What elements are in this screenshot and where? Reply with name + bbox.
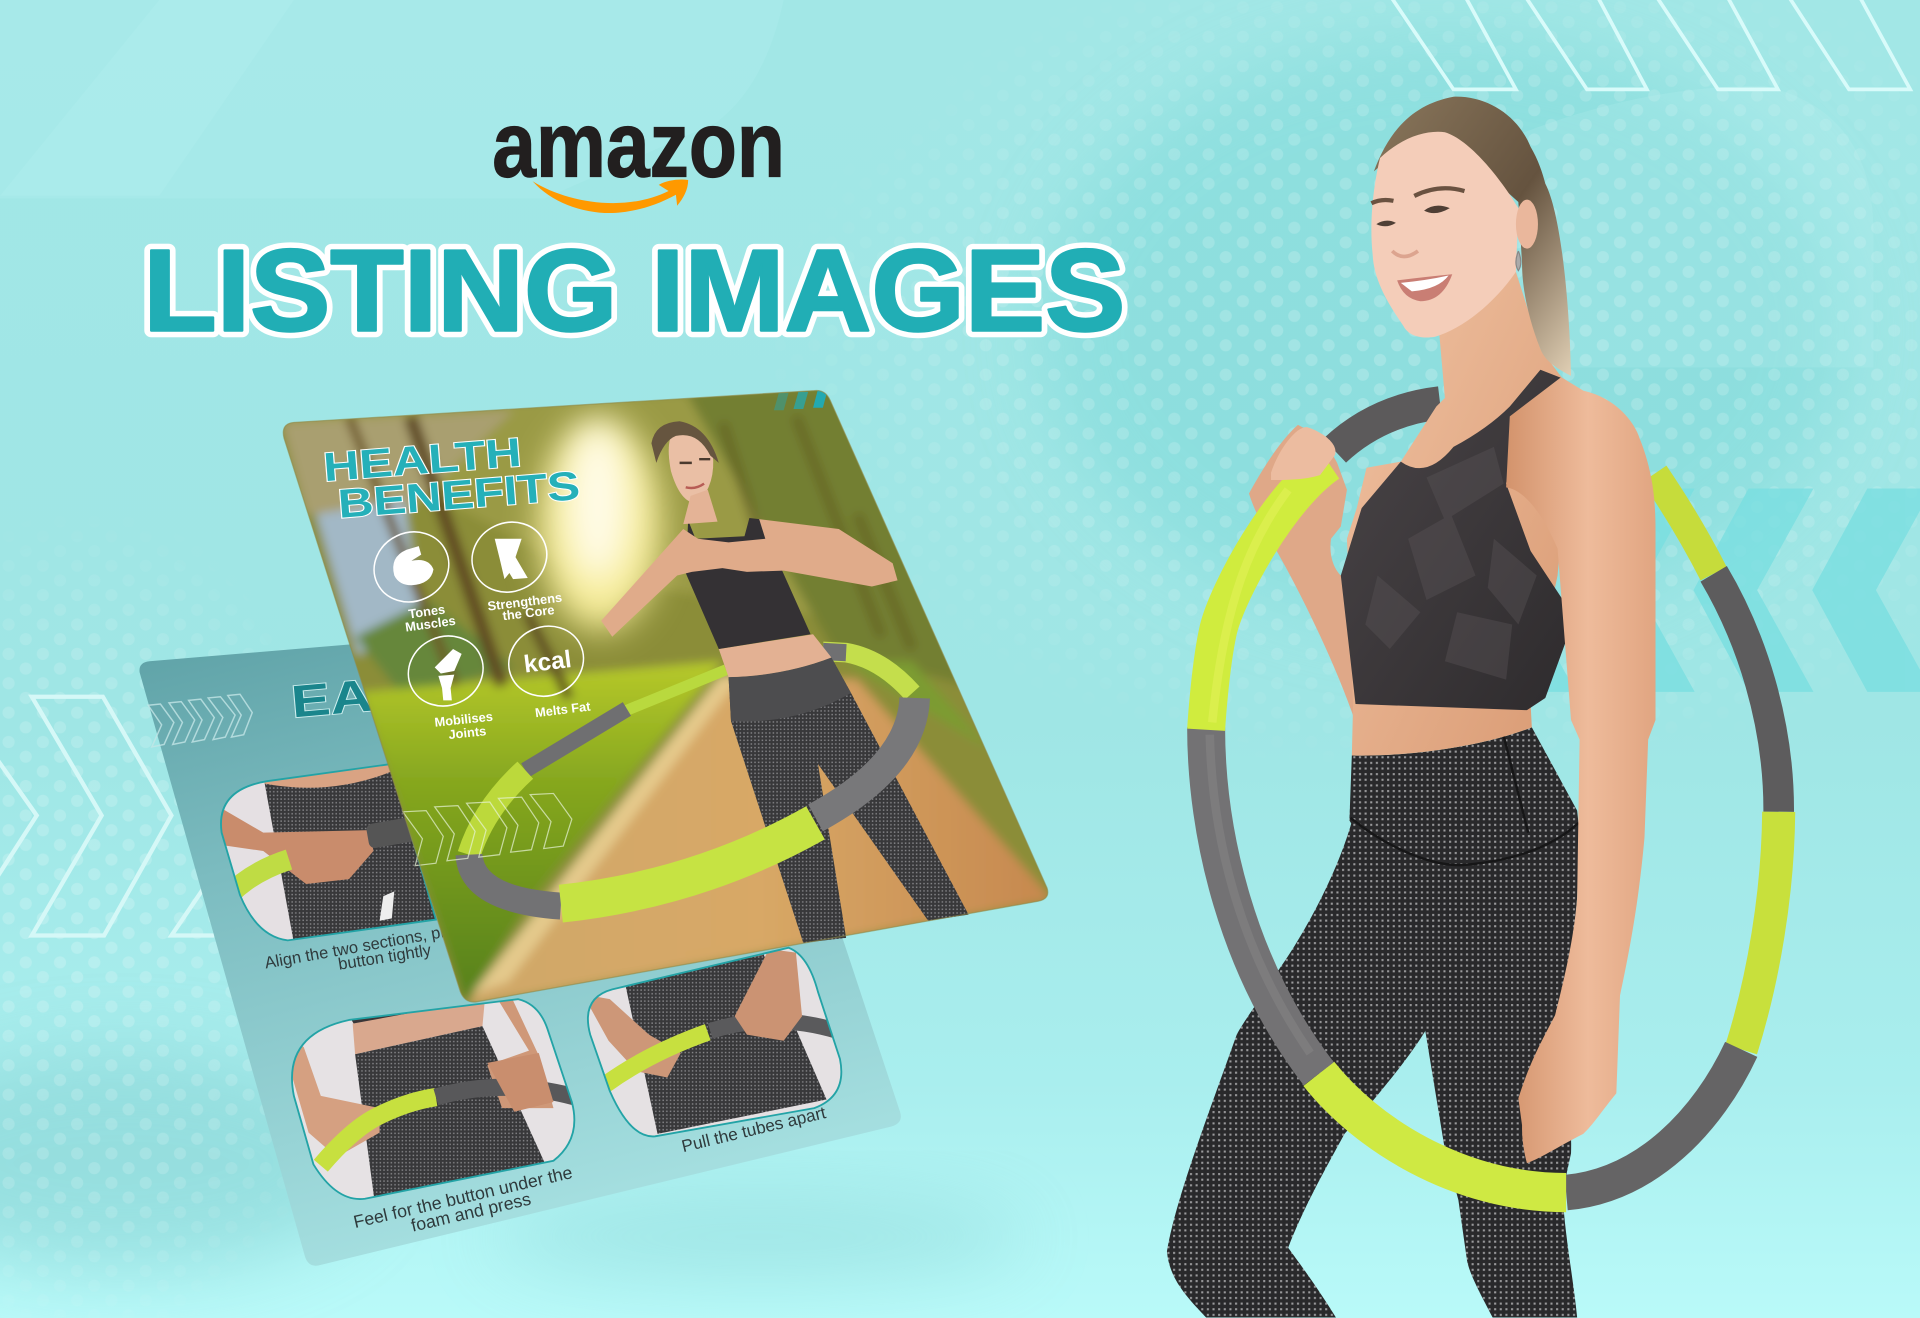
leggings: left leg <box>1167 822 1469 1318</box>
face <box>1371 132 1518 337</box>
chevrons on back card <box>148 694 252 747</box>
step 3 caption: Pull the tubes apart <box>680 1102 828 1156</box>
sunlight glow <box>539 422 661 631</box>
step 2 caption: foam and press <box>409 1189 533 1236</box>
leggings: hips and right leg <box>1349 727 1580 1318</box>
icon: strengthens core <box>460 510 558 604</box>
main model with hoop <box>1167 97 1779 1318</box>
step 1 caption: Align the two sections, press the <box>263 913 500 972</box>
hoop front <box>525 709 627 770</box>
fingers <box>1271 427 1335 480</box>
title: LISTING IMAGES <box>143 226 1125 356</box>
arms and hands <box>601 519 898 637</box>
hoop: behind body <box>1335 403 1714 574</box>
waistband line <box>1351 736 1578 865</box>
label: strengthens the core: Strengthens <box>487 590 563 614</box>
decorative outlines: top-right parallelograms <box>1390 0 1910 89</box>
icon: kcal <box>497 614 595 708</box>
crop top <box>686 518 811 649</box>
heading: health benefits: BENEFITS <box>336 462 582 527</box>
panel: easy assembly back card <box>139 612 901 1266</box>
waistband <box>729 658 851 722</box>
icon: amazon smile arrow <box>533 180 688 213</box>
back of hoop <box>823 651 912 693</box>
panel: health benefits front card <box>269 380 1065 1016</box>
left arm <box>1249 425 1358 722</box>
heading: EASY <box>289 663 452 727</box>
step 3 photo <box>586 946 842 1138</box>
icon: mobilises joints <box>397 624 495 718</box>
step 1 caption: button tightly <box>337 940 433 974</box>
crop top <box>1341 370 1571 710</box>
park photo background <box>269 380 1065 1016</box>
step 2 photo <box>291 998 576 1200</box>
right arm <box>1506 377 1656 1163</box>
neck, chest and midriff <box>1347 272 1573 756</box>
icon: kcal: kcal <box>522 646 573 679</box>
card edge <box>283 390 1048 1002</box>
corner stripes <box>774 389 828 410</box>
head <box>669 425 713 503</box>
step 1 photo <box>220 764 437 942</box>
label: tones muscles: Muscles <box>404 613 457 635</box>
label: strengthens the core: the Core <box>502 602 555 623</box>
legs <box>729 658 969 943</box>
label: mobilises joints: Mobilises <box>434 709 494 730</box>
crop top pattern <box>1365 447 1537 680</box>
facial features <box>1371 188 1538 301</box>
heading: health benefits: HEALTH <box>322 429 523 490</box>
title: LISTING IMAGES <box>143 226 1125 356</box>
decorative outlines: left chevrons <box>0 697 214 935</box>
midriff <box>719 634 831 677</box>
label: mobilises joints <box>434 709 494 742</box>
ponytail and hair <box>1374 97 1571 376</box>
hoop: front <box>1206 463 1779 1193</box>
chevrons on health card <box>403 793 572 866</box>
heading: health benefits <box>322 429 582 527</box>
label: mobilises joints: Joints <box>448 723 487 742</box>
label: melts fat: Melts Fat <box>534 698 592 720</box>
label: tones muscles <box>404 601 457 635</box>
decorative chevrons: right teal <box>1456 489 1920 692</box>
step 2 caption: Feel for the button under the <box>352 1162 574 1232</box>
amazon logo: amazon <box>492 92 785 196</box>
icon: tones muscles <box>363 520 460 614</box>
model on health card <box>469 421 969 943</box>
label: tones muscles: Tones <box>407 601 446 621</box>
